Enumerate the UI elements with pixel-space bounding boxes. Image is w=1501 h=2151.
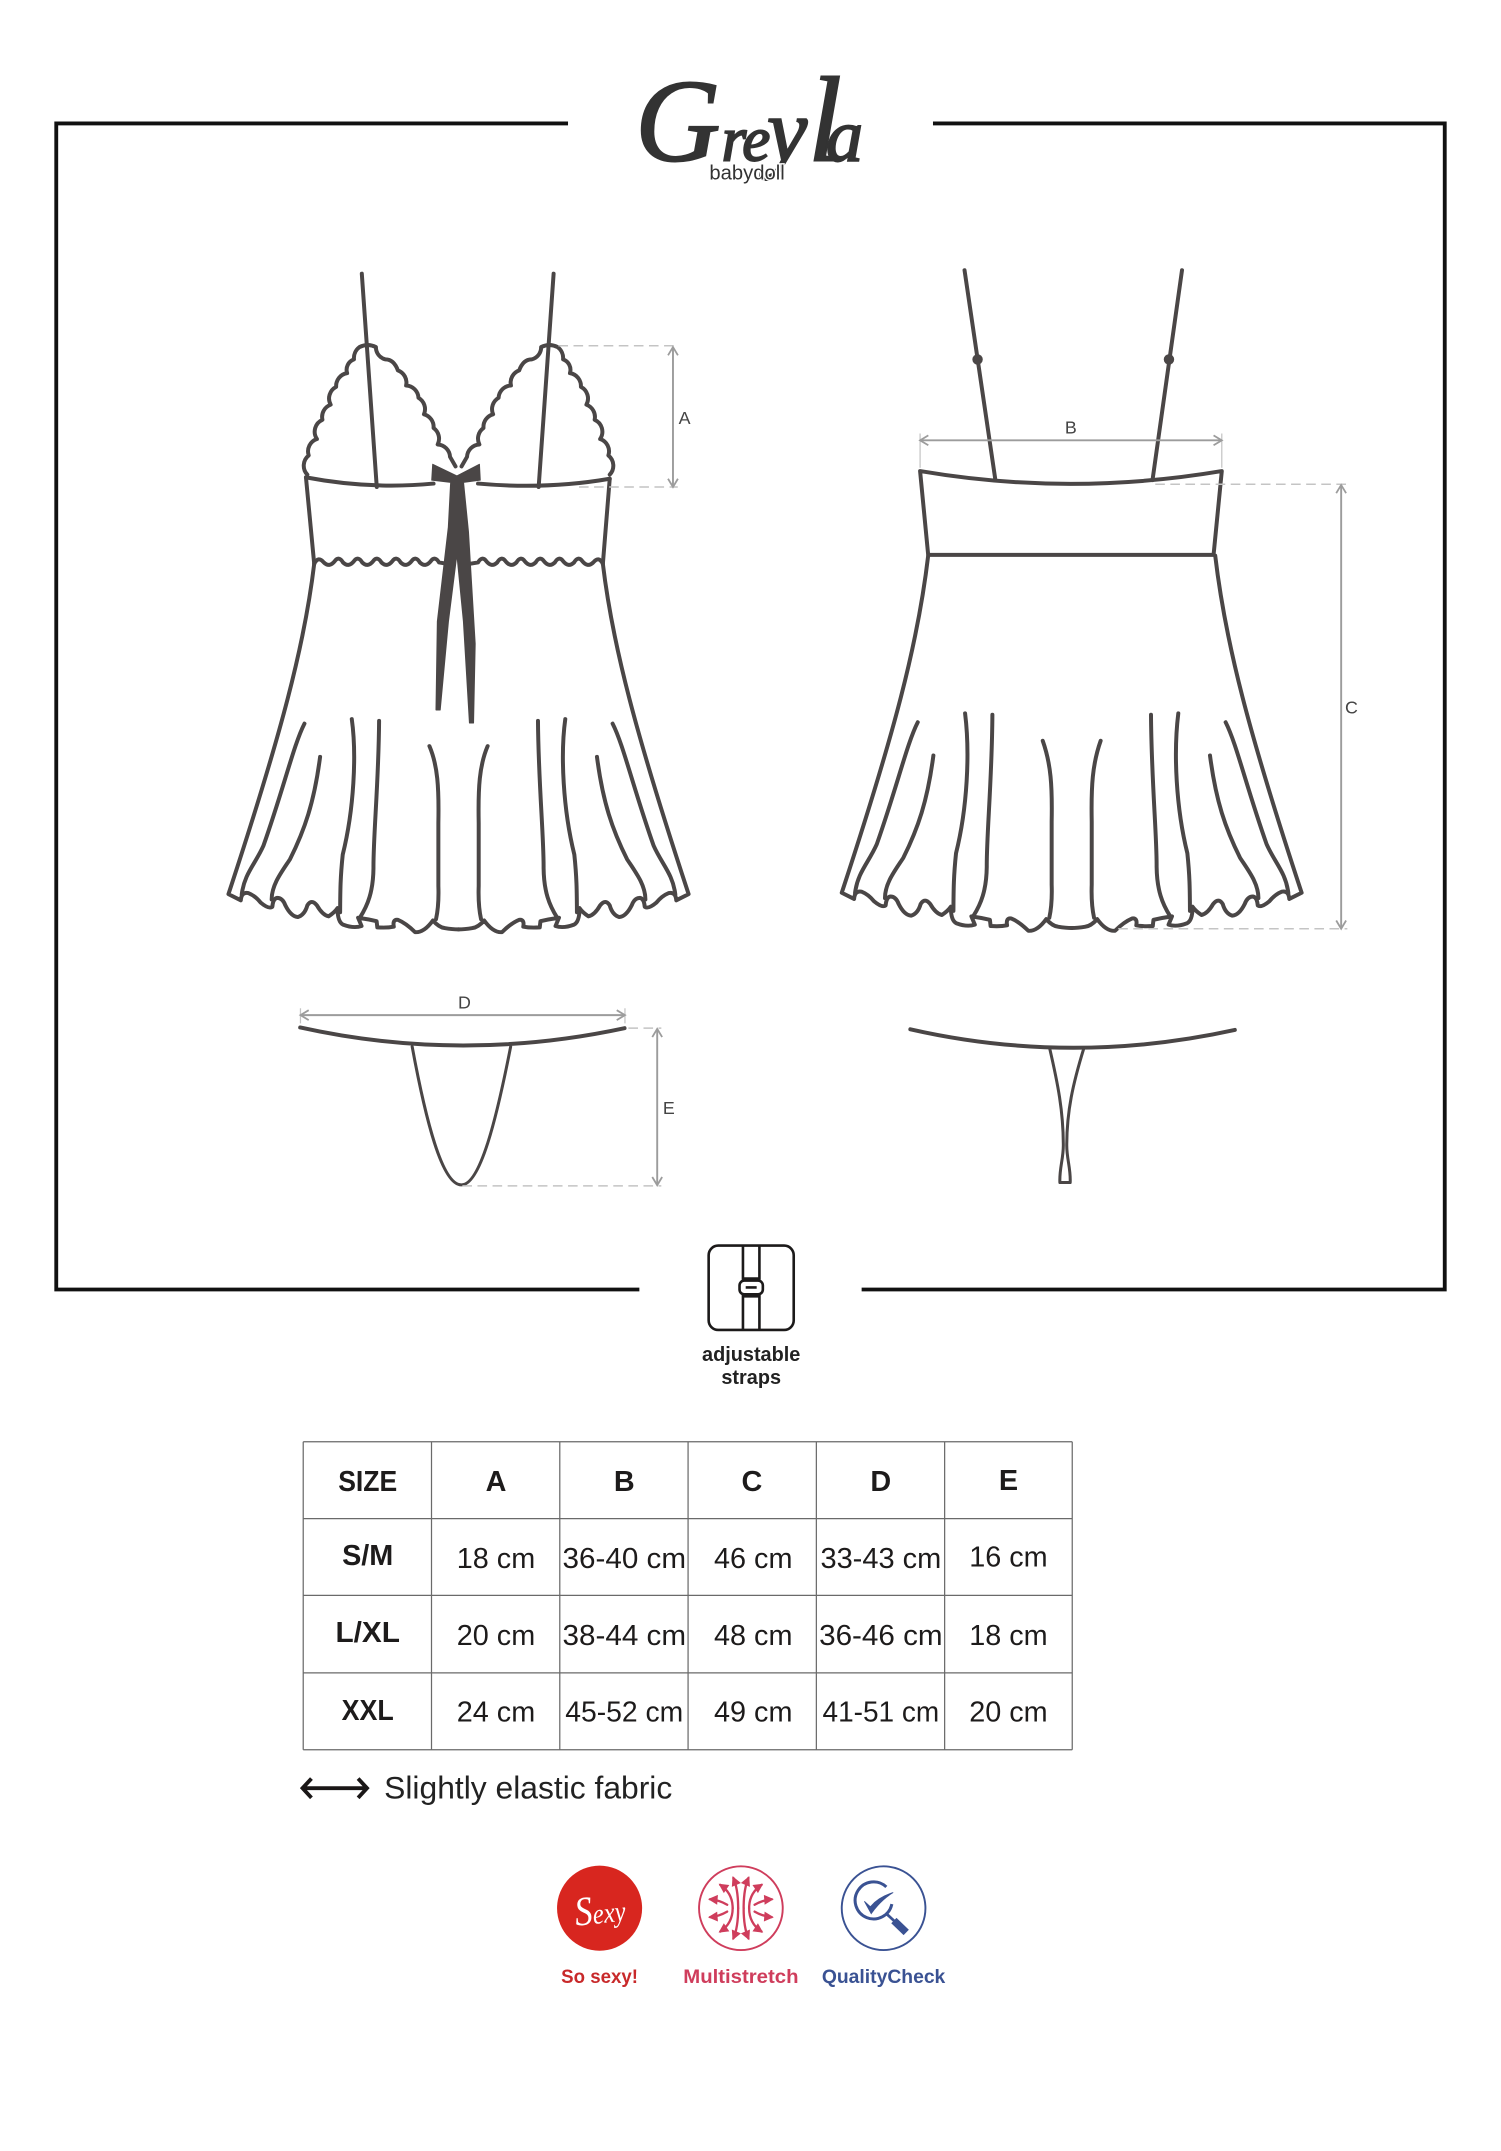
row XXL: 45-52 cm <box>565 1697 683 1729</box>
strap adjuster right <box>1164 354 1174 365</box>
row S/M: 36-40 cm <box>563 1543 686 1575</box>
row S/M <box>342 1540 1048 1575</box>
icon word: Sexy <box>572 1884 628 1935</box>
garment: thong back view <box>910 1029 1235 1183</box>
right half front <box>459 274 689 932</box>
left half front <box>228 274 459 932</box>
badge: so sexy <box>557 1866 642 1988</box>
label D: D <box>458 992 471 1012</box>
icon: red circle <box>557 1866 642 1951</box>
row S/M: 33-43 cm <box>820 1543 941 1575</box>
logo wordmark: l <box>808 54 842 187</box>
label C: C <box>1345 697 1358 717</box>
header row: D <box>870 1466 891 1498</box>
icon: magnifier with check <box>842 1866 925 1950</box>
bow with ribbon tails <box>432 464 480 723</box>
label A: A <box>679 408 691 428</box>
icon: adjustable straps <box>709 1246 794 1330</box>
icon: double arrow <box>303 1779 367 1798</box>
logo wordmark: r <box>722 105 747 175</box>
row L/XL: 38-44 cm <box>563 1620 686 1652</box>
row XXL: 24 cm <box>457 1697 535 1729</box>
logo wordmark: G <box>635 56 720 186</box>
note text: Slightly elastic fabric <box>384 1769 672 1805</box>
strap adjusters <box>972 354 983 365</box>
elastic fabric note <box>303 1769 672 1805</box>
caption: adjustable straps <box>702 1344 800 1389</box>
logo wordmark: a <box>826 96 863 178</box>
logo wordmark: e <box>742 105 770 175</box>
badge caption: Multistretch <box>683 1967 799 1988</box>
garment: babydoll back view <box>842 270 1302 931</box>
frame border <box>56 123 1445 1290</box>
caption: adjustable straps: straps <box>721 1367 781 1389</box>
garment: babydoll front view <box>228 274 689 932</box>
row XXL: 20 cm <box>969 1697 1048 1729</box>
row L/XL: 20 cm <box>457 1620 535 1652</box>
logo subtitle: babydoll <box>709 162 785 185</box>
garment: thong front view <box>300 1027 625 1185</box>
table grid <box>303 1442 1072 1750</box>
header row: B <box>614 1466 635 1498</box>
badge: multistretch <box>683 1866 799 1988</box>
logo: Greyla babydoll <box>635 54 863 187</box>
row S/M: S/M <box>342 1540 393 1572</box>
badge caption: QualityCheck <box>822 1967 946 1988</box>
label B: B <box>1065 417 1077 437</box>
badge: quality check <box>822 1866 946 1988</box>
header row <box>338 1465 1018 1498</box>
row L/XL <box>335 1617 1048 1652</box>
row L/XL: 48 cm <box>714 1620 792 1652</box>
row XXL: XXL <box>342 1695 394 1727</box>
row S/M: 46 cm <box>714 1543 792 1575</box>
header row: E <box>999 1465 1018 1497</box>
size table <box>303 1442 1072 1750</box>
logo wordmark: y <box>759 80 808 181</box>
row XXL: 49 cm <box>714 1697 792 1729</box>
straps and bodice <box>920 270 1222 555</box>
row XXL <box>342 1695 1048 1729</box>
left skirt back <box>842 556 1072 931</box>
icon: stretch arrows <box>699 1866 783 1950</box>
header row: C <box>741 1466 762 1498</box>
badge caption: So sexy! <box>561 1967 638 1988</box>
right skirt back <box>1072 556 1302 931</box>
header row: SIZE <box>338 1466 397 1498</box>
row S/M: 18 cm <box>457 1543 535 1575</box>
row L/XL: 18 cm <box>969 1620 1048 1652</box>
header row: A <box>486 1466 507 1498</box>
row L/XL: 36-46 cm <box>819 1620 943 1652</box>
row S/M: 16 cm <box>969 1542 1048 1574</box>
row XXL: 41-51 cm <box>823 1697 939 1729</box>
label E: E <box>663 1098 675 1118</box>
caption: adjustable straps: adjustable <box>702 1344 800 1366</box>
row L/XL: L/XL <box>335 1617 400 1649</box>
